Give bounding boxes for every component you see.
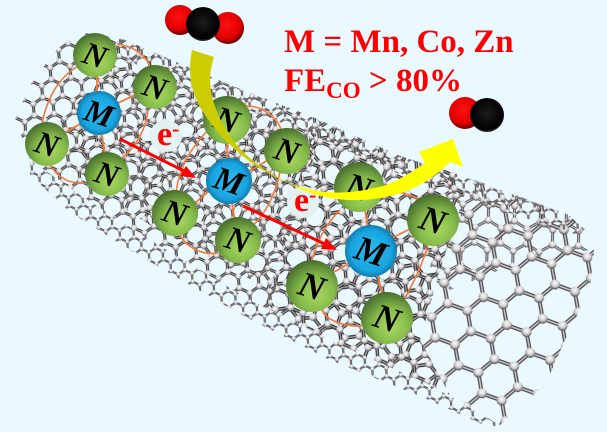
N atom: N [77, 34, 113, 76]
electron badge 1 [150, 116, 182, 153]
nanotube middle front wall [266, 122, 466, 395]
electron arrow 2 [243, 206, 337, 250]
carbon atom [470, 98, 504, 132]
N atom: N [414, 198, 453, 243]
N atom: N [209, 100, 245, 142]
N atom [215, 217, 261, 263]
electron arrow 1 [120, 139, 196, 178]
CO2 molecule [165, 5, 244, 44]
M atom: M [208, 160, 250, 204]
carbon atom [186, 7, 220, 41]
orange rings [42, 44, 428, 326]
N atom: N [89, 153, 125, 195]
nanotube back wall, right end [430, 173, 588, 290]
N atom: N [137, 66, 173, 108]
N atom [407, 194, 459, 246]
ring 2 [176, 106, 281, 254]
oxygen atom [449, 97, 481, 129]
N atom [264, 128, 310, 174]
ring 1 [42, 44, 150, 183]
electron badge 2: - [309, 182, 316, 207]
nanotube middle back wall [266, 126, 466, 388]
oxygen atom [165, 5, 195, 35]
N atom [286, 260, 338, 312]
nanotube upper rim [110, 38, 585, 234]
N atom: N [220, 220, 256, 262]
electron badge 1: - [172, 116, 179, 141]
nanotube left front wall [10, 30, 325, 315]
Faradaic efficiency label: FE [284, 63, 326, 99]
nanotube left back wall [60, 60, 320, 295]
M atom: M [79, 91, 120, 135]
oxygen atom [212, 12, 244, 44]
electron badge 1: e [157, 116, 172, 153]
electron badge 2: e [294, 182, 309, 219]
ring 3 [312, 190, 428, 326]
Faradaic efficiency label: > 80% [361, 63, 462, 99]
N atom: N [340, 165, 379, 210]
group 3: N and M spheres [286, 162, 459, 344]
N atom [361, 292, 413, 344]
Faradaic efficiency label: CO [326, 78, 361, 103]
nanotube front wall, right end [420, 180, 600, 430]
N atom: N [157, 193, 193, 235]
bonds M-N [66, 75, 412, 295]
nanotube lower rim [30, 160, 500, 427]
group 2: N and M spheres [152, 96, 310, 263]
M atom: M [349, 228, 393, 275]
N atom [203, 96, 251, 144]
electron badge 2 [287, 182, 319, 219]
N atom: N [368, 296, 407, 341]
CO molecule [449, 97, 504, 132]
N atom: N [29, 123, 65, 165]
N atom: N [293, 264, 332, 309]
N atom: N [269, 131, 305, 173]
N atom [152, 190, 198, 236]
olive incoming CO2 curved arrow [190, 50, 300, 187]
group 1: N and M spheres [25, 33, 177, 196]
yellow outgoing CO curved arrow [290, 139, 463, 200]
N atom [334, 162, 384, 212]
metal label: M = Mn, Co, Zn [284, 24, 514, 60]
